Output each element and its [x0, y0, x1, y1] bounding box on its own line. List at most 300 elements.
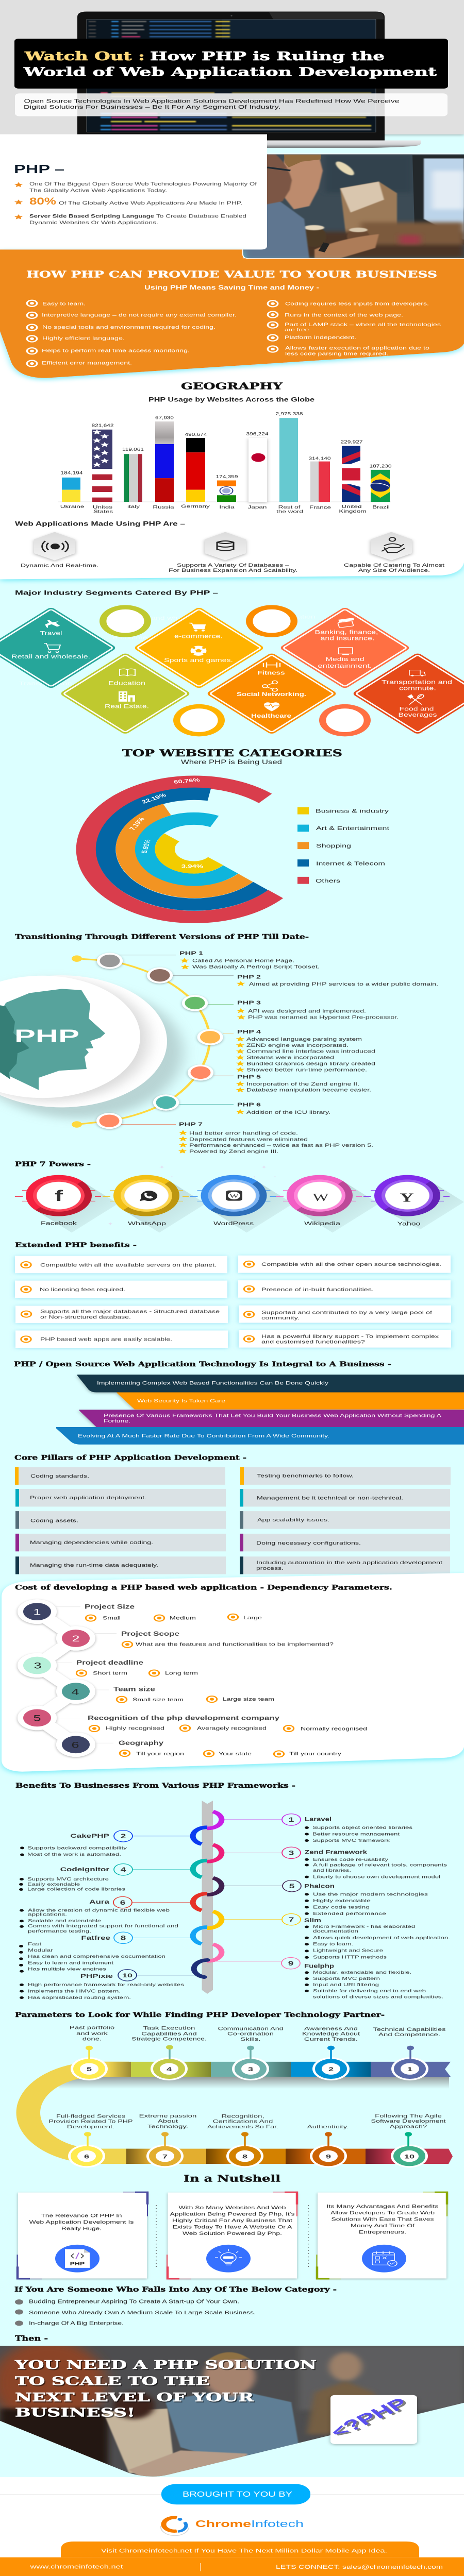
decorative sparkles: ✦ [159, 1165, 165, 1170]
chart country labels: the word [276, 510, 303, 514]
card: relevance of PHP: The Relevance Of PHP In [41, 2213, 122, 2218]
list: right column: less code parsing time required. [285, 351, 388, 357]
labels: lower row: Extreme passion [139, 2113, 196, 2119]
icon: Yahoo: Yahoo [397, 1221, 421, 1227]
card: 3D PHP tag: <?PHP [325, 2395, 413, 2441]
chart legend: Art & Entertainment [316, 825, 389, 831]
ribbon: lower segments [74, 2149, 453, 2164]
milestones: lower row: 7 [162, 2154, 168, 2160]
step 1: project size: Project Size [85, 1604, 135, 1610]
heading: cost of developing: Cost of developing a PHP based web application - Dependency Parameters. [15, 1584, 392, 1591]
framework: Fatfree: Modular [28, 1948, 53, 1953]
card: 3D PHP tag: <?PHP [328, 2396, 416, 2442]
white panel behind geography [0, 322, 464, 579]
diamond: transportation and food [352, 652, 464, 735]
heading: if you are someone: If You Are Someone Who Falls Into Any Of The Below Category - [14, 2286, 337, 2294]
pillar: deployment [15, 1489, 226, 1506]
framework: PHPixie: High performance framework for read-only websites [28, 1982, 184, 1987]
chart values [61, 412, 392, 479]
labels: upper row: Strategic Competence. [131, 2036, 207, 2042]
version: PHP 6: Addition of the ICU library. [246, 1110, 330, 1115]
icon: idea bulb [206, 2245, 251, 2273]
logo: Chrome Infotech [161, 2518, 304, 2536]
framework: Fuelphp: solutions of diverse sizes and complexities. [313, 1995, 443, 1999]
diamond: education and real estate: Real Estate. [105, 703, 149, 709]
footer bar: Visit Chromeinfotech.net If You Have The Next Million Dollar Mobile App Idea. [101, 2548, 387, 2554]
pillar: configurations: Doing necessary configurations. [256, 1541, 361, 1546]
subheading: PHP usage: PHP Usage by Websites Across the Globe [148, 397, 314, 403]
framework: Fuelphp [216, 1957, 443, 1999]
chart values: 490,674 [185, 433, 207, 437]
step 6: geography: Geography [119, 1740, 163, 1747]
framework: CakePHP: Most of the work is automated. [27, 1852, 121, 1857]
version: PHP 1: PHP 1 [179, 951, 204, 956]
framework: Phalcon: Extended performance [313, 1911, 386, 1916]
labels: upper row: Knowledge About [302, 2031, 360, 2037]
framework: Slim [224, 1913, 450, 1959]
labels: upper row: Task Execution [143, 2025, 195, 2031]
intro text box: Digital Solutions For Businesses – Be It For Any Segment Of Industry. [24, 104, 280, 110]
labels: upper row: and work [76, 2031, 108, 2036]
diamond: e-commerce and sports [133, 607, 265, 689]
card: powered by PHP: With So Many Websites And Web [178, 2205, 286, 2210]
faded background labels: and wh [151, 615, 178, 621]
heading: geography: GEOGRAPHY [181, 381, 283, 392]
framework: Laravel: Supports object oriented libraries [312, 1825, 412, 1830]
step 3: project deadline: 3 [34, 1661, 42, 1670]
diamond: fitness and healthcare: Social Networking. [237, 691, 306, 698]
framework: CodeIgnitor [19, 1864, 191, 1892]
ribbon: complex functionality: Implementing Complex Web Based Functionalities Can Be Done Quickly [97, 1380, 329, 1386]
audience list: In-charge Of A Big Enterprise. [29, 2320, 124, 2326]
labels: upper row: Communication And [218, 2026, 284, 2031]
icon: WhatsApp [103, 1175, 206, 1232]
milestones: upper row: 5 [87, 2066, 92, 2073]
decorative sparkles: ✦ [261, 1165, 267, 1170]
card: servers [15, 1256, 227, 1273]
framework: Slim: documentation [313, 1929, 358, 1934]
diamond: banking and media [279, 607, 411, 689]
diamond: fitness and healthcare [206, 652, 338, 735]
feature: dynamic and real-time [21, 532, 98, 568]
step 3: project deadline: Short term [93, 1671, 127, 1676]
photo: developers at monitor [242, 154, 464, 259]
chart legend: Internet & Telecom [316, 860, 385, 867]
icon: WordPress: W [229, 1193, 239, 1199]
framework: Fatfree: Fatfree [81, 1935, 110, 1941]
ribbon: frameworks: Presence Of Various Frameworks That Let You Build Your Business Web Application Without Spending A [104, 1413, 442, 1418]
bullet: biggest open source tech: One Of The Biggest Open Source Web Technologies Powering Majority Of [29, 181, 257, 187]
labels: lower row: Certifications And [213, 2119, 273, 2124]
chart percentage labels: 5.91% [140, 839, 152, 854]
icon: WordPress: WordPress [213, 1221, 254, 1226]
framework: CakePHP: 2 [121, 1833, 126, 1840]
icon: Wikipedia [276, 1175, 379, 1232]
milestones: upper row: 4 [167, 2066, 172, 2073]
step 1: project size: Large [243, 1616, 262, 1620]
framework pole and hooks [193, 1801, 222, 1994]
framework: Fatfree [19, 1932, 191, 1973]
chart percentage labels: 22.19% [140, 792, 168, 805]
feature: catering to audience [344, 532, 445, 573]
framework: Zend: 3 [289, 1850, 294, 1857]
card: powered by PHP: Web Solution Powered By Php. [183, 2231, 282, 2236]
list: left column: No special tools and environment required for coding. [42, 325, 216, 330]
ring: coral [323, 706, 367, 734]
icon: Facebook: f [55, 1188, 63, 1205]
chart values: 67,930 [155, 416, 174, 420]
step 6: geography: Your state [219, 1751, 252, 1756]
audience list [15, 2299, 256, 2326]
card: community: Supported and contributed to by a very large pool of [261, 1310, 433, 1315]
intro text box: Open Source Technologies In Web Application Solutions Development Has Redefined How We Perceive [24, 98, 399, 104]
chart values: 174,359 [216, 474, 238, 479]
bar: United States [92, 429, 112, 502]
framework: Slim: 7 [289, 1917, 294, 1923]
card: powered by PHP [167, 2192, 298, 2279]
faded background labels: ation [297, 614, 316, 620]
pillar: dependencies [15, 1534, 226, 1551]
version: PHP 1: Was Basically A Perl/cgi Script Toolset. [192, 964, 320, 970]
milestones: upper row: 2 [328, 2066, 334, 2073]
serpentine connector [18, 1599, 95, 1757]
ribbon: frameworks [79, 1410, 464, 1427]
labels: upper row: Awareness And [304, 2026, 358, 2031]
labels: upper row: Current Trends. [304, 2037, 358, 2042]
heading: in a nutshell: In a Nutshell [184, 2173, 280, 2184]
card: powered by PHP: Exists Today To Have A Website Or A [173, 2224, 292, 2230]
button: brought to you by [161, 2484, 310, 2504]
decorative sparkles: ✦ [150, 1176, 153, 1179]
heading: extended PHP benefits: Extended PHP benefits - [15, 1241, 137, 1249]
card: library support [239, 1330, 451, 1348]
chart values: 314,140 [308, 456, 330, 461]
bullet: server side scripting: To Create Database Enabled [156, 213, 246, 219]
framework: Fuelphp: Input and URI filtering [313, 1982, 379, 1987]
diamond: fitness and healthcare: Fitness [258, 670, 285, 676]
pillar: scalability [240, 1511, 450, 1529]
version: PHP 7: PHP 7 [179, 1122, 203, 1127]
pillar: run-time data [15, 1556, 226, 1574]
chart country labels: States [93, 510, 113, 514]
framework: Aura: Allow the creation of dynamic and flexible web [28, 1908, 170, 1913]
milestones: lower row: 6 [84, 2154, 89, 2160]
call to action headline [14, 2358, 317, 2420]
chart country labels [60, 504, 390, 514]
hero band [0, 0, 464, 148]
pillar: automation: process. [256, 1566, 284, 1571]
framework: Aura [20, 1896, 191, 1934]
diamond: transportation and food: Transportation and [382, 680, 452, 685]
timeline: PHP versions [72, 953, 234, 1129]
icon: Wikipedia: W [312, 1192, 329, 1204]
ribbon: upper segments [74, 2062, 451, 2077]
feature: catering to audience: Any Size Of Audience. [358, 568, 430, 573]
ribbon: web security: Web Security Is Taken Care [137, 1398, 225, 1403]
version: PHP 4: Showed better run-time performance. [246, 1067, 367, 1073]
card: advantages and benefits: Entrepreneurs. [359, 2229, 406, 2235]
chart country labels: Russia [153, 505, 175, 510]
card: servers: Compatible with all the available servers on the planet. [40, 1263, 217, 1268]
framework: Aura: Comes with integrated support for functional and [28, 1924, 178, 1928]
chart country labels: Brazil [372, 505, 390, 510]
heading: parameters for technology partner: Parameters to Look for While Finding PHP Developer Technology Partner- [15, 2011, 385, 2019]
step 5: company recognition: Normally recognised [301, 1726, 367, 1732]
version: PHP 7: Powered by Zend engine III. [189, 1149, 278, 1154]
card: open source: Compatible with all the other open source technologies. [261, 1262, 441, 1267]
card: in-built: Presence of in-built functionalities. [261, 1287, 374, 1292]
title box: Watch Out : [24, 49, 145, 63]
list: right column: are free. [285, 327, 311, 332]
version: PHP 7: Performance enhanced – twice as fast as PHP version 5. [189, 1143, 373, 1148]
chart values: 187,230 [369, 464, 391, 469]
intro text box [15, 93, 448, 116]
ribbon: fast evolving: Evolving At A Much Faster Rate Due To Contribution From A Wide Community. [78, 1433, 329, 1438]
chart percentage labels [128, 777, 203, 869]
chart values: 229,927 [340, 440, 362, 445]
step 4: team size: Team size [113, 1686, 155, 1692]
card: powered by PHP: Application Being Powered By Php, It's [170, 2211, 295, 2217]
framework: Laravel: Better resource management [312, 1832, 400, 1837]
labels: upper row: Co-ordination [227, 2031, 274, 2037]
milestones: upper row: 3 [248, 2066, 253, 2073]
card: licensing [15, 1281, 227, 1298]
feature: catering to audience: Capable Of Catering To Almost [344, 563, 445, 568]
ring: orange [250, 607, 294, 635]
ribbon: web security [117, 1392, 464, 1410]
card: relevance of PHP: Web Application Development Is [29, 2219, 134, 2225]
card: community: community. [261, 1316, 300, 1320]
framework: Zend: Liberty to choose own development model [313, 1875, 440, 1879]
framework: Aura: Scalable and extendable [28, 1919, 101, 1923]
list: right column: Runs in the context of the web page. [285, 312, 403, 318]
icon: laptop with code [41, 11, 421, 148]
icon: PHP file: PHP [70, 2261, 85, 2266]
ribbons: business integration [56, 1375, 464, 1445]
framework: Aura: 6 [120, 1900, 126, 1906]
bar: Japan [248, 438, 267, 502]
labels: upper row: Skills. [240, 2037, 261, 2042]
framework: CodeIgnitor: Easily extendable [27, 1882, 80, 1887]
icon: WhatsApp: WhatsApp [128, 1221, 166, 1226]
pillar: automation [240, 1556, 450, 1574]
ring: lime [103, 607, 147, 635]
labels: lower row: Full-fledged Services [56, 2113, 125, 2119]
diamond: e-commerce and sports: Sports and games. [164, 657, 233, 664]
diamond: banking and media: Media and [326, 656, 364, 663]
step 5: company recognition: Averagely recognised [197, 1726, 267, 1731]
illustration: PHP head in circle: PHP [14, 1026, 79, 1046]
card: advantages and benefits: Allow Developers To Create Web [330, 2210, 435, 2215]
framework: Aura: Aura [89, 1899, 109, 1905]
card: relevance of PHP [16, 2192, 148, 2279]
diamond: travel and retail: Retail and wholesale. [11, 654, 90, 660]
bullet: server side scripting: Dynamic Websites Or Web Applications. [29, 220, 158, 225]
framework: Fuelphp: Suitable for delivering end to end web [313, 1989, 426, 1993]
framework: Aura: applications. [28, 1912, 67, 1917]
ribbon: frameworks: Fortune. [104, 1418, 130, 1423]
version: PHP 6: PHP 6 [237, 1102, 261, 1108]
list: left column: Highly efficient language. [42, 335, 125, 341]
framework: Phalcon [224, 1880, 428, 1916]
chart country labels: Germany [181, 504, 210, 509]
card: library support: Has a powerful library support - To implement complex [261, 1334, 439, 1339]
panel: how PHP provides value [0, 249, 464, 378]
feature: supports databases: Supports A Variety Of Databases – [177, 563, 289, 568]
heading: benefits from frameworks: Benefits To Businesses From Various PHP Frameworks - [15, 1782, 295, 1790]
bar: Ukraine [62, 478, 80, 502]
framework: CakePHP: CakePHP [71, 1833, 109, 1839]
framework: Fuelphp: 9 [288, 1960, 294, 1967]
pillar: deployment: Proper web application deployment. [30, 1496, 146, 1500]
chart values: 2,975.338 [275, 412, 303, 416]
step 6: geography: Till your country [289, 1751, 341, 1756]
chart percentage labels: 3.94% [181, 863, 203, 869]
step 1: project size: 1 [33, 1607, 41, 1617]
version: PHP 2 [237, 974, 438, 987]
version: PHP 7 [178, 1122, 373, 1154]
bar: France [310, 462, 330, 502]
framework: PHPixie: Has sophisticated routing system. [28, 1995, 131, 2000]
step 6: geography: Till your region [136, 1751, 184, 1756]
version: PHP 3 [237, 999, 399, 1020]
framework: Slim: Slim [304, 1918, 321, 1924]
bar: Russia [155, 421, 174, 502]
diamond: banking and media: Banking, finance, [314, 630, 378, 636]
diamond: e-commerce and sports: e-commerce. [174, 634, 223, 640]
list: right column: Platform independent. [285, 335, 356, 340]
diamond: education and real estate: Education [108, 680, 145, 686]
decorative sparkles: ✦ [253, 1176, 256, 1179]
version: PHP 2: Aimed at providing PHP services to a wider public domain. [249, 982, 438, 987]
labels: lower row: Development. [67, 2124, 114, 2129]
card: relevance of PHP: Really Huge. [61, 2226, 102, 2231]
diamond: fitness and healthcare: Healthcare [251, 713, 291, 719]
version: PHP 3: PHP was renamed as Hypertext Pre-processor. [248, 1015, 399, 1020]
step 5: company recognition [23, 1709, 367, 1732]
chart country labels: United [341, 505, 362, 509]
call to action headline: YOU NEED A PHP SOLUTION [14, 2358, 317, 2372]
pillar: coding assets [15, 1511, 226, 1529]
pillar: coding assets: Coding assets. [30, 1518, 78, 1523]
ribbon: fast evolving [56, 1427, 464, 1445]
step 5: company recognition: Highly recognised [106, 1726, 164, 1731]
version: PHP 4: ZEND engine was incorporated. [246, 1043, 349, 1048]
icon: Yahoo [363, 1175, 464, 1232]
card: community [239, 1306, 451, 1323]
title box: World of Web Application Development [23, 65, 437, 79]
framework: Fatfree: Easy to learn and implement [28, 1961, 114, 1965]
framework: CakePHP [20, 1830, 191, 1857]
footer bar [0, 2541, 464, 2576]
list: left column: Interpretive language – do not require any external compiler. [42, 312, 237, 318]
pillar: testing benchmarks [240, 1467, 451, 1485]
footer bar: www.chromeinfotech.net [29, 2564, 123, 2570]
framework: CakePHP: Supports backward compatibility [27, 1846, 127, 1851]
pillar: scalability: App scalability issues. [257, 1518, 329, 1522]
labels: lower row: Authenticity. [307, 2124, 349, 2129]
heading: transitioning through versions: Transitioning Through Different Versions of PHP Till Date- [15, 933, 309, 941]
framework: Zend: and libraries. [313, 1868, 351, 1873]
framework: Slim: Lightweight and Secure [313, 1948, 383, 1953]
pillar: coding standards [15, 1467, 225, 1485]
step 4: team size: Large size team [223, 1697, 274, 1702]
diamond: banking and media: entertainment. [318, 663, 372, 669]
diamond: education and real estate [59, 652, 191, 735]
decorative sparkles: ✦ [273, 1176, 277, 1179]
pillar: dependencies: Managing dependencies while coding. [30, 1540, 153, 1545]
bar: Italy [124, 454, 142, 502]
step 3: project deadline: Long term [165, 1671, 198, 1676]
framework: Fuelphp: Modular, extendable and flexible. [313, 1971, 411, 1975]
version: PHP 6 [236, 1102, 330, 1115]
list: right column: Part of LAMP stack – where all the technologies [285, 322, 441, 327]
step 2: project scope: Project Scope [121, 1631, 179, 1637]
heading: integral to a business: PHP / Open Source Web Application Technology Is Integral to A Business - [14, 1361, 391, 1368]
labels: upper row: Capabilities And [141, 2031, 197, 2037]
chart legend: Business & industry [316, 808, 389, 814]
card: databases [15, 1306, 228, 1323]
card: advantages and benefits: Its Many Advantages And Benefits [326, 2204, 438, 2209]
icon: planner and stopwatch [362, 2245, 406, 2273]
framework: CodeIgnitor: Supports MVC architecture [27, 1877, 109, 1882]
framework: Fatfree: 8 [121, 1935, 126, 1942]
list: left column: Easy to learn. [42, 301, 86, 307]
icon: Wikipedia: Wikipedia [304, 1221, 341, 1226]
card: powered by PHP: Highly Critical For Any Business That [172, 2218, 293, 2223]
framework: CodeIgnitor: Large collection of code libraries [27, 1887, 125, 1892]
faded background labels [19, 614, 316, 686]
audience list: Someone Who Already Own A Medium Scale To Large Scale Business. [29, 2310, 256, 2315]
version: PHP 7: Deprecated features were eliminated [189, 1137, 308, 1142]
framework: Phalcon: Phalcon [304, 1883, 335, 1889]
chart values: 821,642 [92, 423, 114, 428]
diamond: transportation and food: Beverages [398, 712, 437, 718]
labels: lower row: Software Development [371, 2119, 446, 2124]
card: in-built [238, 1280, 451, 1298]
card: scalable [15, 1330, 228, 1348]
chart percentage labels: 7.19% [128, 817, 146, 831]
framework: Slim: Micro Framework - has elaborated [313, 1924, 415, 1929]
step 5: company recognition: 5 [33, 1714, 41, 1723]
chart legend [297, 807, 389, 884]
framework: Laravel: Supports MVC framework [312, 1838, 390, 1843]
heading: major industry segments: Major Industry Segments Catered By PHP – [15, 590, 218, 596]
version: PHP 1: Called As Personal Home Page. [192, 958, 294, 963]
labels: upper row: Technical Capabilities [373, 2027, 445, 2032]
title box: How PHP is Ruling the [150, 49, 385, 63]
bullet: server side scripting: Server Side Based Scripting Language [29, 213, 154, 219]
feature: dynamic and real-time: Dynamic And Real-time. [21, 563, 98, 568]
card: scalable: PHP based web apps are easily scalable. [40, 1337, 172, 1342]
pillar: run-time data: Managing the run-time data adequately. [30, 1563, 158, 1568]
version: PHP 5 [236, 1074, 371, 1093]
milestones: lower row [68, 2132, 428, 2168]
framework: CodeIgnitor: CodeIgnitor [60, 1867, 110, 1873]
chart values: 396,224 [246, 432, 269, 436]
audience list: Budding Entrepreneur Aspiring To Create A Start-up Of Your Own. [29, 2299, 239, 2304]
icon: PHP file [55, 2245, 100, 2273]
pillar: management: Management be it technical or non-technical. [257, 1496, 403, 1501]
labels: lower row: Following The Agile [375, 2113, 442, 2119]
call to action headline: NEXT LEVEL OF YOUR [15, 2391, 254, 2404]
diamond: travel and retail [0, 607, 117, 689]
call to action headline: BUSINESS! [15, 2405, 135, 2420]
version: PHP 4: PHP 4 [237, 1029, 261, 1035]
icon: Facebook: Facebook [41, 1221, 77, 1226]
framework: Slim: Easy to learn. [313, 1942, 353, 1946]
icon: Yahoo: Y [400, 1191, 414, 1205]
